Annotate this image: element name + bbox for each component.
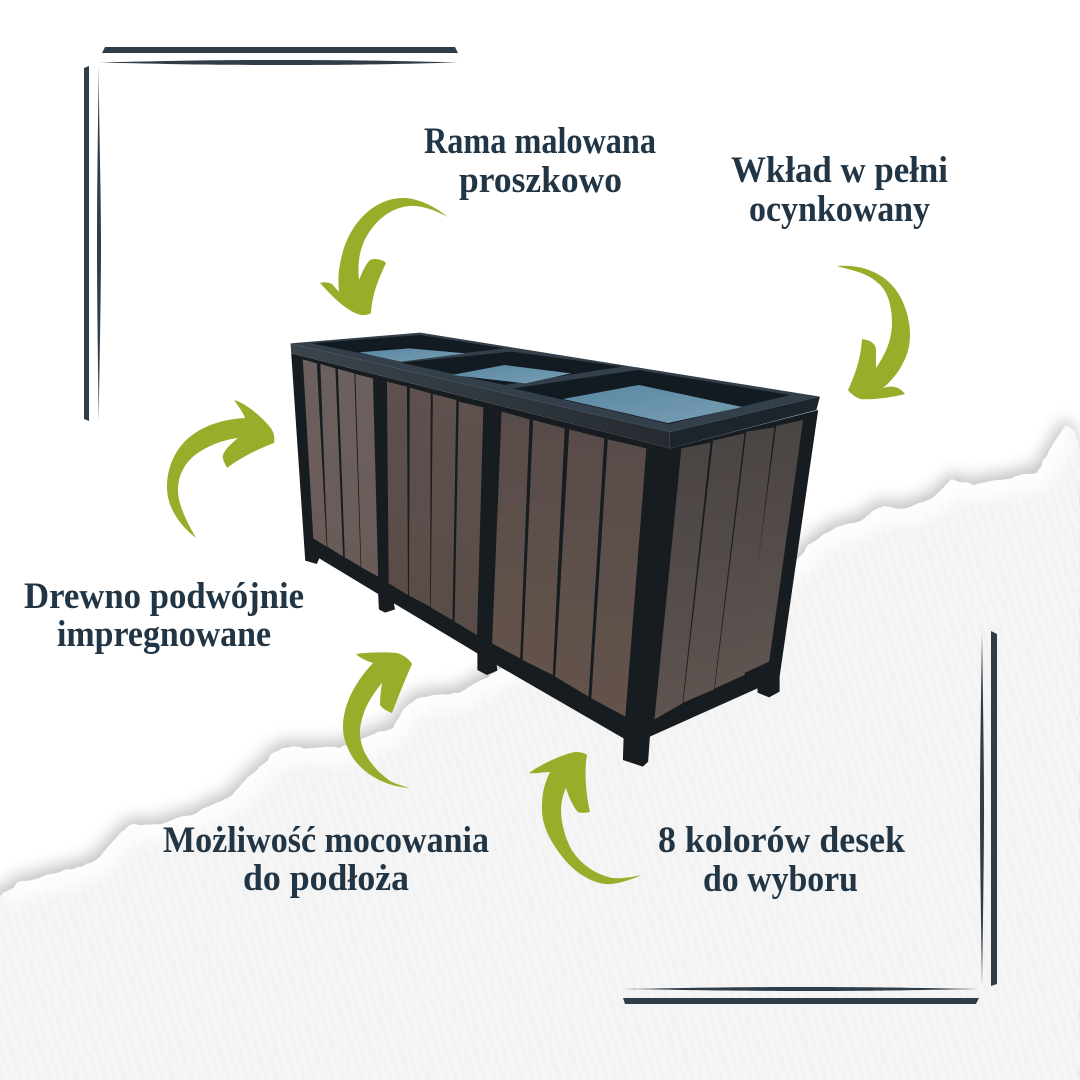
label: board colours [658, 820, 905, 900]
label: galvanised insert: Wkład w pełni [731, 150, 948, 191]
planter boards section two [387, 382, 483, 635]
label: board colours: 8 kolorów desek [658, 820, 905, 861]
label: impregnated wood [24, 576, 304, 655]
label: galvanised insert [731, 150, 948, 230]
planter boards section one [303, 359, 378, 577]
arrow: ground mounting [343, 652, 412, 788]
planter dark frame and legs [291, 353, 818, 767]
planter photo illustration [291, 333, 820, 767]
planter boards right side [654, 420, 803, 719]
label: galvanised insert: ocynkowany [749, 189, 930, 230]
label: board colours: do wyboru [703, 859, 858, 900]
arrow: powder-coated frame [320, 198, 448, 315]
arrow: impregnated wood [167, 400, 274, 538]
torn paper background [0, 425, 1080, 1080]
label: powder-coated frame: proszkowo [459, 160, 622, 201]
label: powder-coated frame [424, 121, 656, 201]
planter boards section three [492, 412, 646, 717]
metal liners [359, 348, 742, 423]
arrow: board colours [529, 752, 642, 884]
bottom-right corner frame [623, 631, 997, 1004]
label: impregnated wood: impregnowane [57, 614, 271, 655]
label: powder-coated frame: Rama malowana [424, 121, 656, 162]
planter top rim [291, 333, 820, 448]
top-left corner frame [84, 47, 458, 421]
label: ground mounting: do podłoża [243, 858, 409, 899]
label: ground mounting: Możliwość mocowania [163, 820, 489, 861]
label: ground mounting [163, 820, 489, 899]
arrow: galvanised insert [837, 266, 910, 399]
label: impregnated wood: Drewno podwójnie [24, 576, 304, 617]
